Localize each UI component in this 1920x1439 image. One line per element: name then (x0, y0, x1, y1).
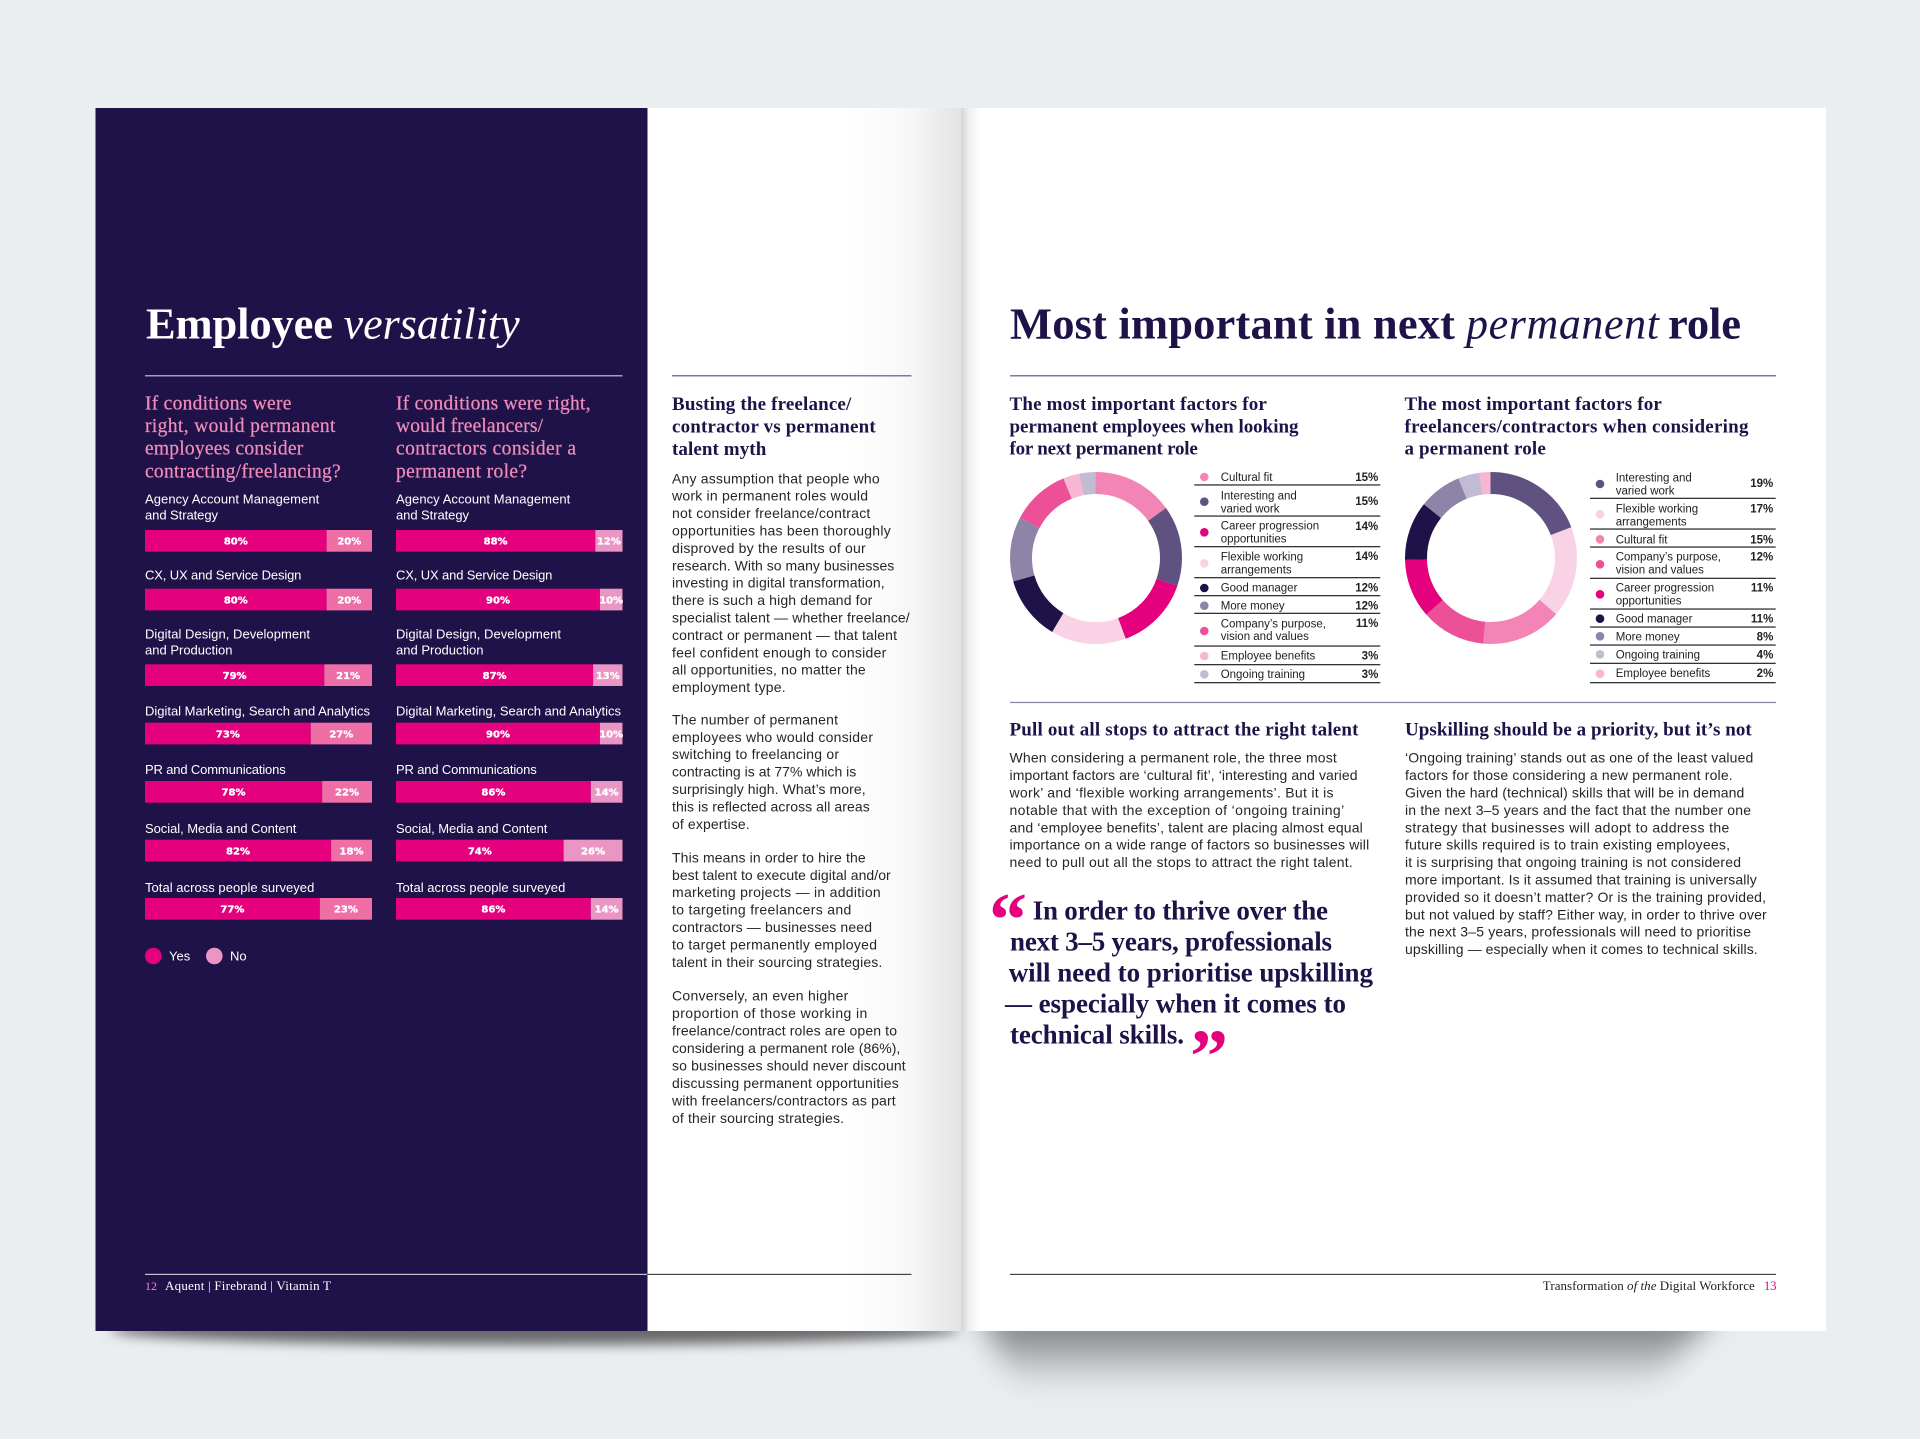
legend: yes / no (145, 948, 247, 964)
bar chart: permanent employees: CX, UX and Service Design (145, 567, 301, 582)
paragraph 1: contract or permanent — that talent (672, 627, 897, 643)
donut legend: freelancers: varied work (1616, 485, 1675, 497)
donut legend: freelancers: 4% (1757, 649, 1773, 661)
donut legend: permanent employees: vision and values (1221, 631, 1309, 643)
bar chart: permanent employees: 22% (335, 788, 359, 799)
quote text: next 3–5 years, professionals (1010, 927, 1332, 957)
bar chart: freelancers: 86% (481, 905, 505, 916)
body copy: pull out all stops: work’ and ‘flexible working arrangements’. But it is (1008, 784, 1334, 800)
pull quote (989, 878, 1374, 1099)
paragraph 2: The number of permanent (672, 711, 838, 727)
paragraph 4: considering a permanent role (86%), (672, 1040, 900, 1056)
bar chart: permanent employees: 73% (216, 729, 240, 740)
heading: permanent employees: permanent employees when looking (1010, 416, 1299, 437)
quote text: will need to prioritise upskilling (1009, 958, 1374, 988)
title: employee versatility (146, 298, 520, 348)
donut legend: permanent employees: Employee benefits (1221, 650, 1316, 662)
bar chart: freelancers: and Strategy (396, 507, 470, 522)
panel: employee versatility (96, 108, 648, 1331)
body copy: pull out all stops: When considering a permanent role, the three most (1010, 750, 1337, 766)
paragraph 2: this is reflected across all areas (672, 799, 870, 815)
paragraph 2: surprisingly high. What’s more, (672, 781, 866, 797)
body copy: upskilling: ‘Ongoing training’ stands out as one of the least valued (1405, 750, 1753, 766)
donut legend: permanent employees: 15% (1355, 496, 1378, 508)
paragraph 1: research. With so many businesses (672, 557, 894, 573)
quote text (1004, 895, 1374, 1049)
donut legend: permanent employees: More money (1221, 600, 1285, 612)
paragraph 4: discussing permanent opportunities (672, 1075, 899, 1091)
donut legend: freelancers: vision and values (1616, 564, 1704, 576)
donut legend: freelancers: More money (1616, 631, 1680, 643)
paragraph 2: of expertise. (672, 816, 750, 832)
bar chart: freelancers: 13% (596, 671, 620, 682)
title: employee versatility: Employee (146, 298, 333, 348)
question: freelancers: contractors consider a (396, 438, 576, 459)
text block: upskilling (1405, 719, 1767, 957)
bar chart: freelancers: 87% (483, 671, 507, 682)
paragraph 4: Conversely, an even higher (672, 988, 849, 1004)
paragraph 4: proportion of those working in (672, 1005, 867, 1021)
icon: opening quote mark: “ (989, 878, 1027, 962)
paragraph 1: feel confident enough to consider (672, 644, 887, 660)
right page (961, 108, 1826, 1331)
donut legend: freelancers: arrangements (1616, 517, 1687, 529)
donut legend: permanent employees: 3% (1362, 669, 1378, 681)
quote text: — especially when it comes to (1004, 989, 1346, 1019)
panel: permanent employees factors (1010, 394, 1380, 683)
donut legend: permanent employees: Career progression (1221, 520, 1319, 532)
bar chart: permanent employees: PR and Communications (145, 762, 286, 777)
donut chart: permanent employees (1021, 483, 1171, 633)
donut legend: freelancers: 19% (1750, 478, 1773, 490)
heading: pull out all stops: Pull out all stops to attract the right talent (1010, 719, 1359, 740)
donut legend: permanent employees: opportunities (1221, 534, 1287, 546)
body copy: upskilling: more important. Is it assumed that training is universally (1405, 872, 1757, 888)
donut legend: freelancers: Employee benefits (1616, 668, 1711, 680)
body copy: pull out all stops: need to pull out all the stops to attract the right talent. (1010, 854, 1353, 870)
donut legend: freelancers: 11% (1751, 613, 1773, 625)
legend: yes / no: No (230, 948, 247, 964)
donut legend: permanent employees: Flexible working (1221, 551, 1303, 563)
donut legend: freelancers: Career progression (1616, 582, 1714, 594)
footer: left page: Aquent | Firebrand | Vitamin T (165, 1278, 331, 1293)
donut legend: permanent employees: varied work (1221, 503, 1280, 515)
donut legend: permanent employees: Good manager (1221, 582, 1298, 594)
paragraph 2: employees who would consider (672, 729, 873, 745)
title: employee versatility: versatility (344, 300, 520, 348)
question: freelancers (396, 393, 591, 482)
heading: permanent employees (1010, 394, 1299, 460)
donut legend: freelancers: 11% (1751, 582, 1773, 594)
bar chart: freelancers: CX, UX and Service Design (396, 567, 552, 582)
bar chart: freelancers: PR and Communications (396, 762, 537, 777)
bar chart: freelancers: Agency Account Management (396, 491, 571, 506)
body copy: upskilling: the next 3–5 years, professionals will need to prioritise (1405, 924, 1751, 940)
title: most important in next permanent role (1010, 298, 1741, 348)
paragraph 3: talent in their sourcing strategies. (672, 954, 882, 970)
donut legend: permanent employees: 12% (1355, 600, 1378, 612)
bar chart: freelancers: 12% (597, 537, 621, 548)
body copy: upskilling: it is surprising that ongoing training is not considered (1405, 854, 1741, 870)
donut legend: freelancers: 8% (1757, 631, 1773, 643)
bar chart: permanent employees: 78% (222, 788, 245, 799)
bar chart: permanent employees: Social, Media and Content (145, 821, 297, 836)
paragraph 2: contracting is at 77% which is (672, 764, 856, 780)
bar chart: freelancers: Digital Design, Development (396, 626, 561, 641)
body copy: pull out all stops (1008, 750, 1369, 870)
heading: busting the myth: contractor vs permanent (672, 416, 876, 437)
paragraph 1: all opportunities, no matter the (672, 662, 866, 678)
bar chart: permanent employees: 20% (337, 595, 361, 606)
paragraph 1: there is such a high demand for (672, 592, 873, 608)
bar chart: freelancers: 74% (468, 846, 492, 857)
body copy: upskilling: in the next 3–5 years and the fact that the number one (1405, 802, 1751, 818)
bar chart: permanent employees: 79% (223, 671, 247, 682)
bar chart: freelancers: 90% (486, 729, 510, 740)
heading: freelancers: freelancers/contractors when considering (1404, 416, 1749, 437)
donut legend: freelancers (1590, 473, 1776, 683)
donut legend: permanent employees: 3% (1362, 650, 1378, 662)
bar chart: freelancers: Social, Media and Content (396, 821, 548, 836)
paragraph 3: best talent to execute digital and/or (672, 867, 891, 883)
title: most important in next permanent role: permanent (1463, 300, 1661, 348)
paragraph 4: with freelancers/contractors as part (671, 1092, 896, 1108)
donut legend: permanent employees: arrangements (1221, 564, 1292, 576)
donut legend: permanent employees (1194, 472, 1380, 683)
heading: permanent employees: The most important factors for (1010, 394, 1267, 415)
bar chart: permanent employees: 77% (220, 905, 244, 916)
paragraph 3: This means in order to hire the (672, 849, 866, 865)
donut legend: permanent employees: Company’s purpose, (1221, 618, 1326, 630)
paragraph 3: contractors — businesses need (672, 919, 872, 935)
quote text: technical skills. (1010, 1019, 1184, 1049)
footer: left page: 12 (145, 1279, 157, 1293)
paragraph 1: employment type. (672, 679, 786, 695)
paragraph 3: to targeting freelancers and (672, 902, 851, 918)
bar chart: permanent employees: Digital Marketing, Search and Analytics (145, 703, 370, 718)
bar chart: permanent employees: 18% (340, 846, 363, 857)
question: freelancers: If conditions were right, (396, 393, 591, 414)
bar chart: freelancers: Total across people surveyed (396, 880, 565, 895)
text block: pull out all stops (1008, 719, 1369, 870)
donut legend: permanent employees: 15% (1355, 472, 1378, 484)
bar chart: permanent employees: Total across people surveyed (145, 880, 314, 895)
body copy: upskilling: future skills required is to train existing employees, (1405, 837, 1730, 853)
bar chart: freelancers: 10% (599, 729, 623, 740)
question: permanent employees: right, would permanent (145, 416, 336, 437)
paragraph 1: investing in digital transformation, (672, 575, 885, 591)
body copy: pull out all stops: importance on a wide range of factors so businesses will (1010, 837, 1369, 853)
paragraph 3: marketing projects — in addition (672, 884, 881, 900)
donut legend: permanent employees: 12% (1355, 582, 1378, 594)
donut legend: freelancers: opportunities (1616, 595, 1682, 607)
bar chart: permanent employees: and Strategy (145, 507, 218, 522)
bar chart: permanent employees: 23% (334, 905, 358, 916)
bar chart: freelancers: 14% (595, 788, 619, 799)
paragraph 2: switching to freelancing or (672, 746, 839, 762)
body copy: pull out all stops: and ‘employee benefits’, talent are placing almost equal (1010, 819, 1363, 835)
title: most important in next permanent role: Most important in next (1010, 298, 1455, 348)
footer: right page: 13 (1764, 1279, 1776, 1293)
bar chart: freelancers: Digital Marketing, Search and Analytics (396, 703, 622, 718)
body copy: upskilling: but not valued by staff? Either way, in order to thrive over (1405, 906, 1767, 922)
question: permanent employees (145, 393, 341, 482)
quote text: In order to thrive over the (1033, 895, 1328, 925)
bar chart: permanent employees: 80% (224, 595, 248, 606)
bar chart: permanent employees: Digital Design, Development (145, 626, 310, 641)
question: permanent employees: employees consider (145, 438, 304, 459)
donut legend: freelancers: 17% (1750, 503, 1773, 515)
donut legend: permanent employees: Ongoing training (1221, 669, 1305, 681)
body copy: upskilling: provided so it doesn’t matter? Or is the training provided, (1405, 889, 1766, 905)
bar chart: permanent employees: 82% (226, 846, 250, 857)
body copy: pull out all stops: important factors are ‘cultural fit’, ‘interesting and varied (1010, 767, 1358, 783)
paragraph 1: opportunities has been thoroughly (672, 522, 891, 538)
body copy: upskilling: Given the hard (technical) skills that will be in demand (1405, 784, 1744, 800)
heading: freelancers: The most important factors for (1404, 394, 1662, 415)
donut legend: freelancers: Ongoing training (1616, 649, 1700, 661)
bar chart: permanent employees: 20% (337, 537, 361, 548)
question: freelancers: permanent role? (396, 461, 527, 482)
body copy: upskilling: factors for those considering a new permanent role. (1405, 767, 1733, 783)
donut legend: permanent employees: 14% (1355, 521, 1378, 533)
body copy: upskilling: strategy that businesses will adopt to address the (1405, 819, 1730, 835)
heading: freelancers: a permanent role (1404, 439, 1546, 460)
bar chart: freelancers: 86% (481, 788, 505, 799)
bar chart: freelancers (396, 491, 623, 920)
bar chart: permanent employees: Agency Account Management (145, 491, 320, 506)
heading: busting the myth (672, 394, 876, 460)
heading: upskilling: Upskilling should be a priority, but it’s not (1405, 719, 1752, 740)
paragraph 1 (671, 470, 910, 695)
donut legend: freelancers: Good manager (1616, 613, 1693, 625)
heading: busting the myth: Busting the freelance/ (672, 394, 852, 415)
bar chart: permanent employees: 80% (224, 537, 248, 548)
body copy: pull out all stops: notable that with the exception of ‘ongoing training’ (1010, 802, 1344, 818)
donut legend: freelancers: Interesting and (1616, 473, 1692, 485)
bar chart: freelancers: and Production (396, 642, 484, 657)
paragraph 4: so businesses should never discount (672, 1058, 906, 1074)
icon: closing quote mark: ” (1190, 1015, 1228, 1099)
question: permanent employees: contracting/freelancing? (145, 461, 341, 482)
paragraph 4: freelance/contract roles are open to (672, 1023, 897, 1039)
bar chart: freelancers: 10% (599, 595, 623, 606)
paragraph 1: specialist talent — whether freelance/ (672, 610, 910, 626)
bar chart: permanent employees (145, 491, 372, 920)
body copy: upskilling: upskilling — especially when it comes to technical skills. (1405, 941, 1758, 957)
heading: busting the myth: talent myth (672, 439, 767, 460)
page shadows (110, 1300, 1725, 1398)
donut legend: freelancers: Company’s purpose, (1616, 551, 1721, 563)
panel: freelancers factors (1404, 394, 1776, 683)
bar chart: permanent employees: 27% (329, 729, 353, 740)
donut legend: permanent employees: Cultural fit (1221, 472, 1273, 484)
legend: yes / no: Yes (169, 948, 191, 964)
donut legend: freelancers: 2% (1757, 668, 1773, 680)
donut legend: freelancers: 12% (1750, 551, 1773, 563)
donut legend: permanent employees: Interesting and (1221, 490, 1297, 502)
donut legend: permanent employees: 11% (1356, 618, 1378, 630)
donut chart: freelancers (1416, 483, 1566, 633)
donut legend: freelancers: Flexible working (1616, 504, 1698, 516)
heading: freelancers (1404, 394, 1749, 460)
donut legend: freelancers: Cultural fit (1616, 534, 1668, 546)
bar chart: permanent employees: 21% (336, 671, 360, 682)
paragraph 1: work in permanent roles would (671, 488, 868, 504)
footer: right page: Transformation of the Digital Workforce (1543, 1278, 1755, 1293)
heading: permanent employees: for next permanent role (1010, 439, 1198, 460)
body copy: upskilling (1405, 750, 1767, 957)
paragraph 3 (672, 849, 891, 970)
left page (96, 108, 961, 1331)
question: freelancers: would freelancers/ (396, 416, 544, 437)
paragraph 1: Any assumption that people who (672, 470, 880, 486)
paragraph 4 (671, 988, 906, 1126)
paragraph 3: to target permanently employed (672, 937, 877, 953)
bar chart: freelancers: 26% (581, 846, 605, 857)
question: permanent employees: If conditions were (145, 393, 291, 414)
bar chart: freelancers: 14% (595, 905, 619, 916)
bar chart: freelancers: 88% (484, 537, 508, 548)
bar chart: permanent employees: and Production (145, 642, 232, 657)
paragraph 4: of their sourcing strategies. (672, 1110, 844, 1126)
bar chart: freelancers: 90% (486, 595, 510, 606)
donut legend: permanent employees: 14% (1355, 551, 1378, 563)
paragraph 1: not consider freelance/contract (672, 505, 870, 521)
text column: busting the myth (671, 394, 910, 1126)
donut legend: freelancers: 15% (1750, 534, 1773, 546)
paragraph 1: disproved by the results of our (672, 540, 866, 556)
paragraph 2 (672, 711, 873, 832)
title: most important in next permanent role: role (1668, 298, 1741, 348)
